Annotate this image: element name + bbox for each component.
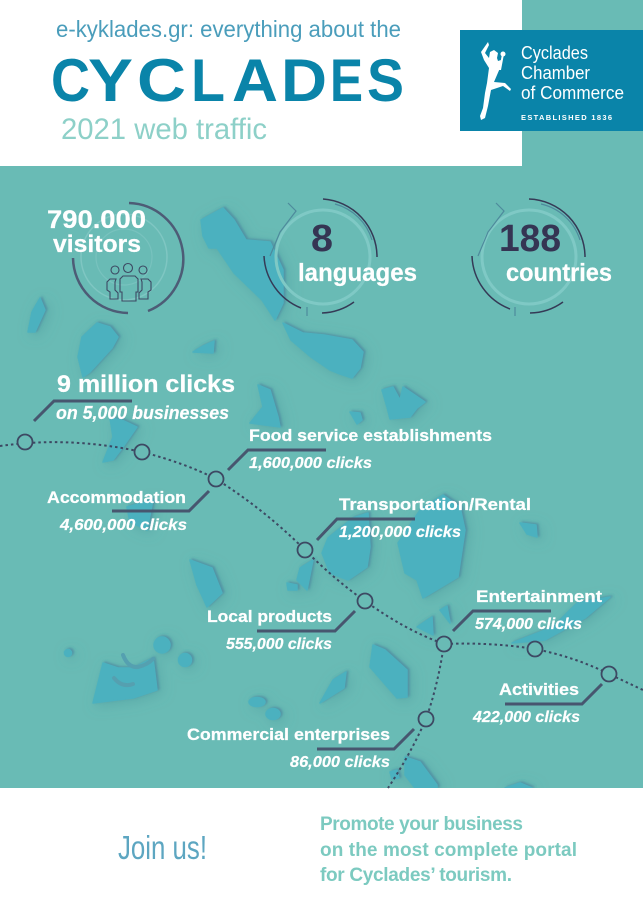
stat: 188 countries: [472, 199, 612, 316]
languages label: languages: [298, 259, 417, 287]
footer: promotional message: [320, 814, 577, 886]
footer: promotional message: for Cyclades’ tourism.: [320, 865, 512, 886]
main title: S: [367, 47, 404, 114]
callout: Transportation/Rental: [317, 495, 531, 541]
map: Cyclades islands: [28, 208, 610, 788]
callout: 9 million clicks: [34, 371, 235, 423]
logo wording: Cyclades: [521, 43, 588, 63]
stat: 790.000 visitors: [47, 203, 183, 313]
callout: Activities: Activities: [499, 680, 579, 699]
callout: Transportation/Rental: Transportation/Rental: [339, 495, 531, 514]
footer: promotional message: Promote your business: [320, 814, 523, 835]
callout: 9 million clicks: 9 million clicks: [57, 371, 235, 398]
countries label: countries: [506, 259, 612, 287]
logo: Cyclades Chamber of Commerce: [460, 30, 643, 131]
callout: Entertainment: [453, 587, 602, 633]
languages number: 8: [311, 218, 333, 260]
visitor rings: [73, 203, 183, 313]
logo wording: of Commerce: [521, 83, 624, 103]
header line of text: e-kyklades.gr: everything about the: [56, 16, 401, 42]
main title: L: [191, 47, 225, 114]
language rings: [264, 199, 377, 316]
country rings: [472, 199, 585, 316]
logo wording: ESTABLISHED 1836: [521, 113, 612, 122]
callout: Local products: 555,000 clicks: [226, 636, 332, 653]
callout: Commercial enterprises: Commercial enterprises: [187, 725, 390, 744]
callout: Entertainment: 574,000 clicks: [475, 616, 582, 633]
icon: people: [107, 264, 151, 301]
stat: 8 languages: [264, 199, 417, 316]
dotted route: [0, 442, 643, 788]
main title: [51, 47, 404, 114]
callout: Accommodation: Accommodation: [47, 488, 186, 507]
logo wording: [521, 43, 624, 122]
callout: 9 million clicks: on 5,000 businesses: [56, 403, 229, 423]
route nodes: [18, 434, 616, 726]
callout: Accommodation: 4,600,000 clicks: [59, 517, 187, 534]
footer: Join us: Join us!: [118, 829, 207, 866]
main title: E: [330, 47, 363, 114]
callout: Local products: Local products: [207, 607, 332, 626]
callout: Transportation/Rental: 1,200,000 clicks: [339, 524, 461, 541]
subtitle: 2021 web traffic: [61, 113, 267, 146]
callout: Commercial enterprises: [187, 725, 414, 771]
countries number: 188: [499, 218, 561, 260]
visitors number: 790.000: [47, 206, 146, 234]
callout: Entertainment: Entertainment: [476, 587, 602, 606]
callout: Commercial enterprises: 86,000 clicks: [290, 754, 390, 771]
main title: D: [281, 47, 327, 114]
header white panel: [0, 0, 522, 166]
main title: A: [232, 47, 278, 114]
main title: Y: [88, 47, 133, 114]
callout: Food service establishments: Food service establishments: [249, 426, 492, 445]
main title: C: [137, 47, 186, 114]
visitors label: visitors: [53, 231, 141, 258]
icon: Hermes figure: [480, 42, 511, 120]
main title: C: [51, 47, 90, 114]
footer white panel: [0, 788, 643, 899]
logo wording: Chamber: [521, 63, 590, 83]
footer: promotional message: on the most complete portal: [320, 840, 577, 861]
callout: Food service establishments: 1,600,000 clicks: [249, 455, 372, 472]
callout: Local products: [207, 607, 355, 653]
callout: Activities: [472, 680, 602, 726]
callout: Accommodation: [47, 488, 209, 534]
island detail: Milos bay: [114, 655, 153, 685]
callout: Activities: 422,000 clicks: [472, 709, 580, 726]
callout: Food service establishments: [228, 426, 492, 472]
